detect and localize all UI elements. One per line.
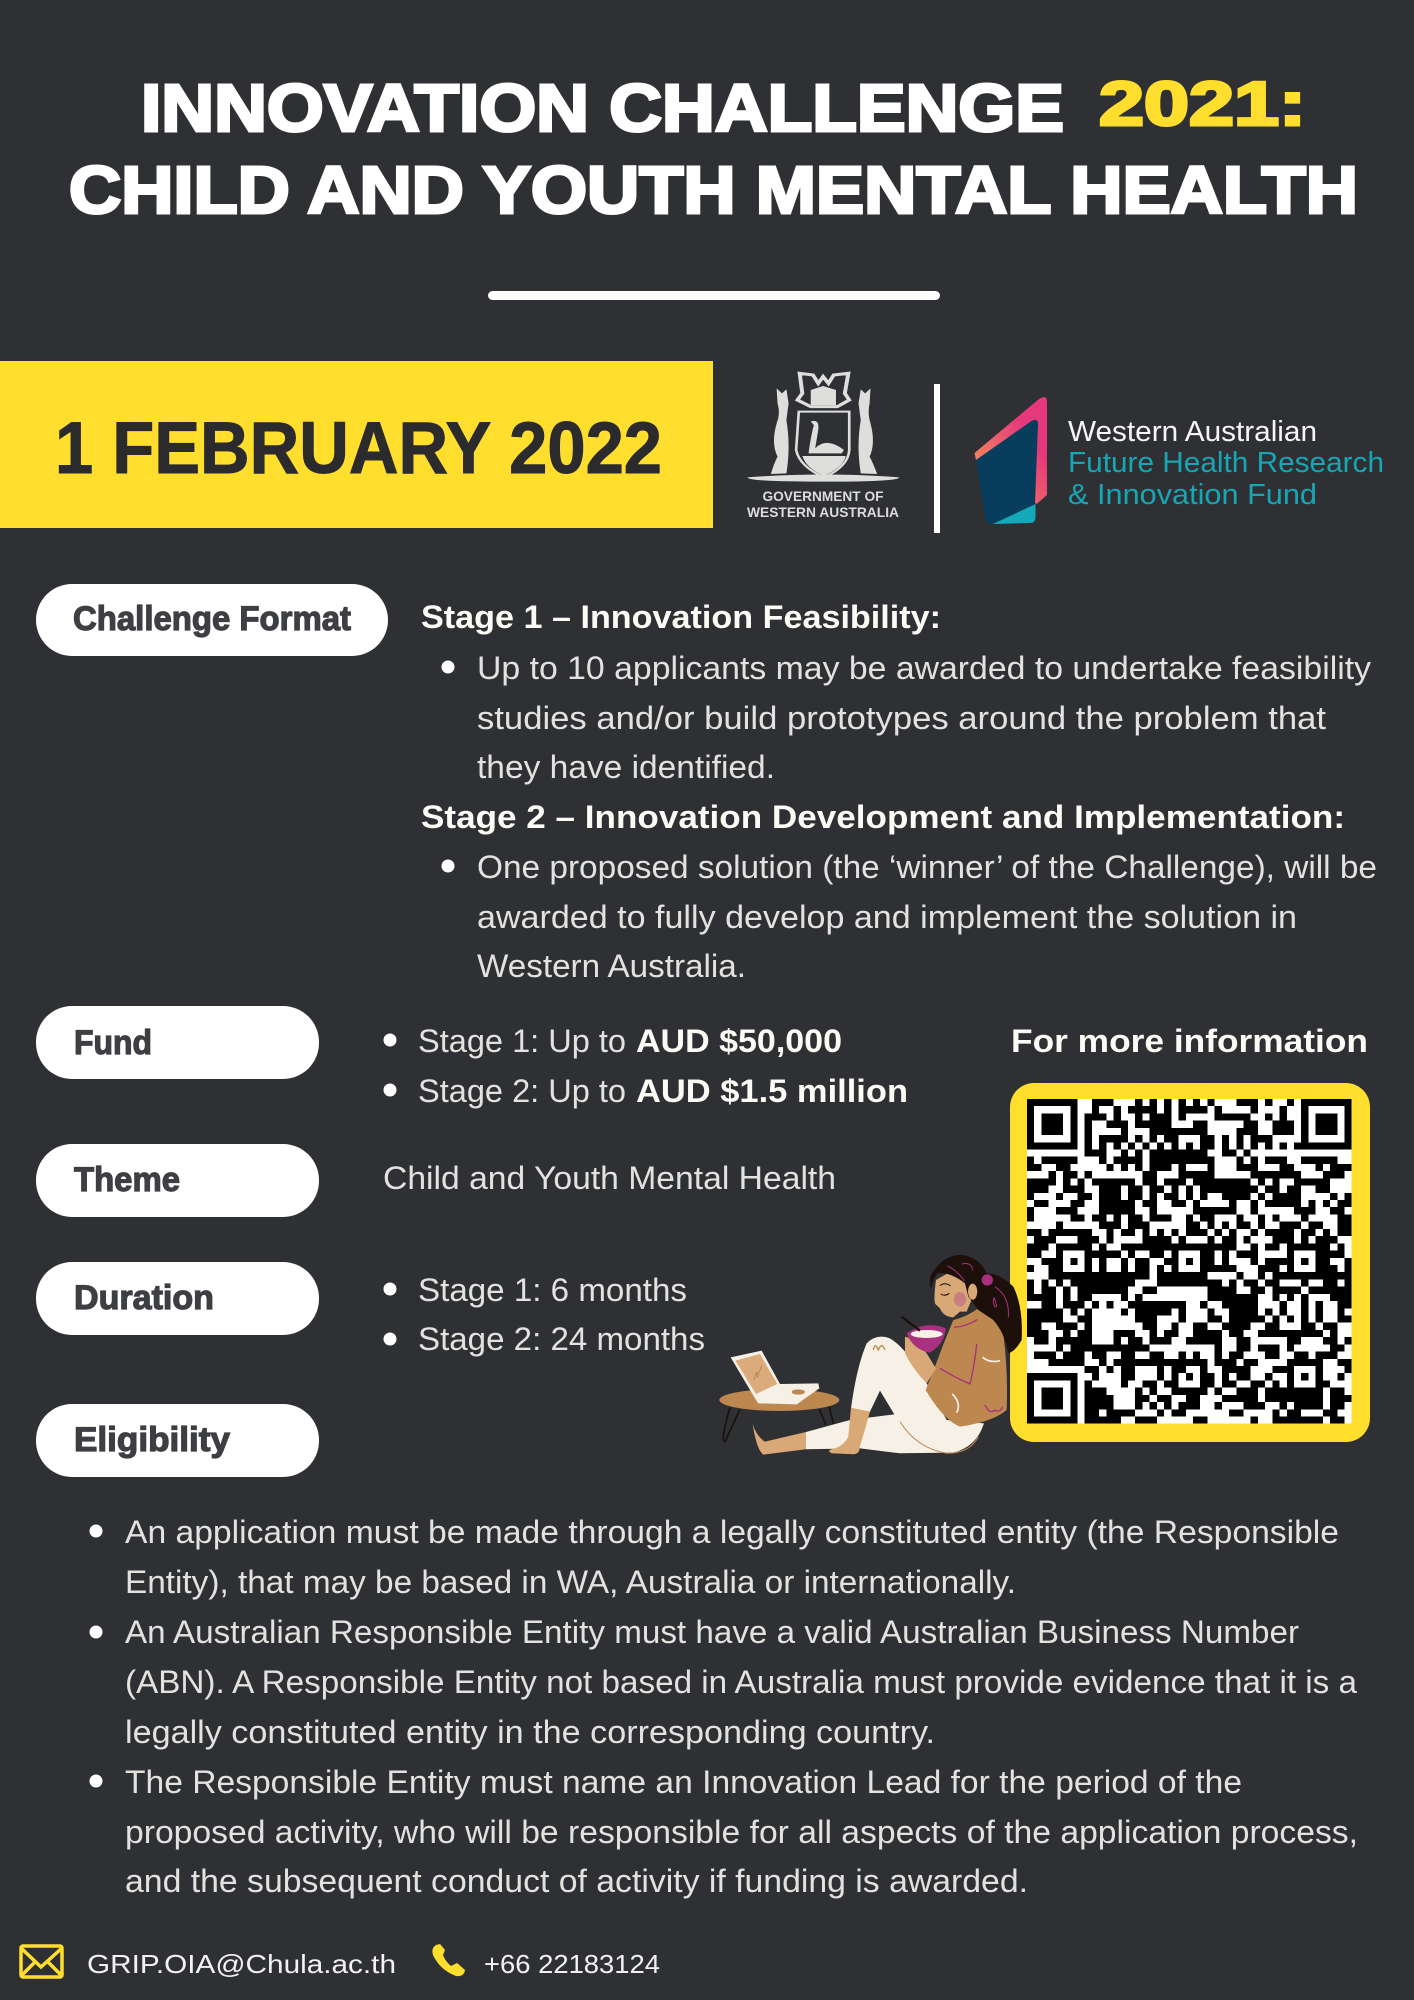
title: 2021: — [1099, 70, 1306, 139]
label: Duration — [36, 1262, 319, 1335]
title: INNOVATION CHALLENGE — [141, 71, 1064, 146]
table — [719, 1389, 839, 1441]
title divider — [488, 291, 940, 300]
QR code panel — [1010, 1083, 1370, 1442]
text block: duration — [384, 1272, 705, 1357]
text block: eligibility criteria: legally constituted entity in the corresponding country. — [125, 1714, 935, 1750]
text block: duration: Stage 1: 6 months — [418, 1272, 687, 1308]
text block: challenge format stages — [421, 599, 1377, 984]
text block: challenge format stages: Western Australia. — [477, 948, 746, 984]
logo: Future Health Research and Innovation Fund: Future Health Research — [1068, 447, 1384, 479]
text block: eligibility criteria: and the subsequent conduct of activity if funding is awarded. — [125, 1863, 1028, 1899]
text block: theme: Child and Youth Mental Health — [383, 1160, 836, 1196]
logo divider — [934, 384, 940, 533]
text block: fund amounts: AUD $50,000 — [636, 1023, 842, 1059]
date banner — [0, 361, 713, 528]
text block: challenge format stages: Up to 10 applicants may be awarded to undertake feasibility — [477, 650, 1371, 686]
text block: eligibility criteria: (ABN). A Responsible Entity not based in Australia must provide evidence that it is a — [125, 1664, 1357, 1700]
girl — [753, 1255, 1022, 1455]
text block: fund amounts: Stage 1: Up to — [418, 1023, 626, 1059]
icon: phone — [432, 1944, 465, 1976]
text block: eligibility criteria: The Responsible Entity must name an Innovation Lead for the period of the — [125, 1764, 1242, 1800]
text block: eligibility criteria: An application must be made through a legally constituted entity (the Responsible — [125, 1514, 1339, 1550]
logo: Government of Western Australia crest — [747, 373, 899, 520]
title: CHILD AND YOUTH MENTAL HEALTH — [69, 153, 1358, 228]
text block: eligibility criteria — [90, 1514, 1358, 1899]
contact email: GRIP.OIA@Chula.ac.th — [87, 1949, 396, 1979]
title — [69, 70, 1358, 228]
text block: eligibility criteria: proposed activity, who will be responsible for all aspects of the application process, — [125, 1814, 1358, 1850]
label: Fund — [36, 1006, 319, 1079]
logo: Future Health Research and Innovation Fund: & Innovation Fund — [1068, 479, 1317, 511]
label: Fund: Fund — [74, 1024, 152, 1062]
text block: fund amounts: Stage 2: Up to — [418, 1073, 626, 1109]
text block: duration: Stage 2: 24 months — [418, 1321, 705, 1357]
text block: eligibility criteria: Entity), that may be based in WA, Australia or internationally. — [125, 1564, 1016, 1600]
text block: challenge format stages: Stage 1 – Innovation Feasibility: — [421, 599, 941, 635]
text block: challenge format stages: awarded to fully develop and implement the solution in — [477, 899, 1297, 935]
label: Challenge Format — [36, 584, 388, 656]
logo: Government of Western Australia crest: GOVERNMENT OF — [762, 488, 884, 504]
label: Theme: Theme — [74, 1161, 180, 1199]
text block: fund amounts: AUD $1.5 million — [636, 1073, 908, 1109]
logo: Government of Western Australia crest: WESTERN AUSTRALIA — [747, 504, 899, 520]
icon: envelope — [21, 1946, 62, 1977]
logo: Future Health Research and Innovation Fund: Western Australian — [1068, 416, 1317, 448]
label: Eligibility — [36, 1404, 319, 1477]
label: Theme — [36, 1144, 319, 1217]
logo: Future Health Research and Innovation Fund — [974, 397, 1384, 524]
heading: for more information: For more information — [1011, 1023, 1368, 1059]
contact phone: +66 22183124 — [484, 1949, 660, 1979]
label: Eligibility: Eligibility — [74, 1421, 230, 1459]
text block: fund amounts — [384, 1023, 908, 1109]
text block: challenge format stages: One proposed solution (the ‘winner’ of the Challenge), will be — [477, 849, 1377, 885]
text block: challenge format stages: studies and/or build prototypes around the problem that — [477, 700, 1326, 736]
date banner: 1 FEBRUARY 2022 — [55, 408, 662, 489]
illustration: girl with bowl and laptop — [719, 1255, 1022, 1455]
text block: challenge format stages: Stage 2 – Innovation Development and Implementation: — [421, 799, 1345, 835]
label: Challenge Format: Challenge Format — [73, 600, 351, 638]
label: Duration: Duration — [74, 1279, 214, 1317]
text block: eligibility criteria: An Australian Responsible Entity must have a valid Australian Business Number — [125, 1614, 1299, 1650]
text block: challenge format stages: they have identified. — [477, 749, 775, 785]
laptop — [731, 1351, 819, 1404]
